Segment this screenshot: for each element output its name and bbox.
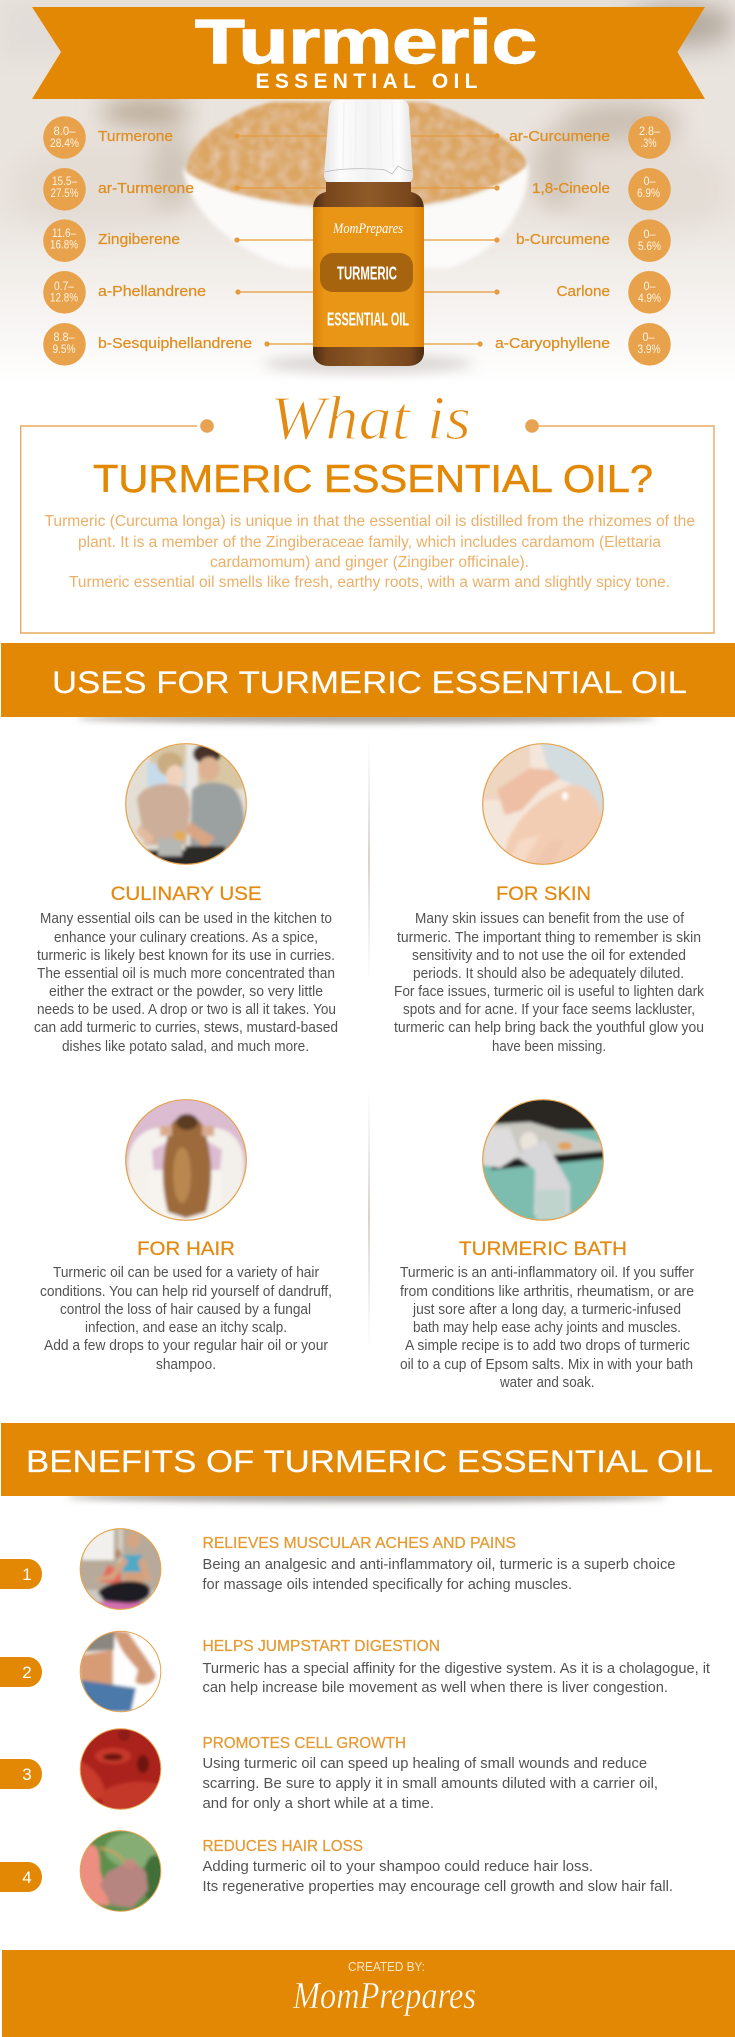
compound: b-Curcumene: 5.6% [638, 241, 661, 253]
compound: Zingiberene [43, 219, 180, 262]
compound: a-Phellandrene: a-Phellandrene [98, 284, 206, 300]
description: Its regenerative properties may encourage cell growth and slow hair fall. [202, 1878, 673, 1895]
compound: a-Caryophyllene: 0– [642, 332, 655, 344]
compound: ar-Curcumene [509, 116, 671, 159]
description: Turmeric has a special affinity for the digestive system. As it is a cholagogue, it [202, 1660, 711, 1677]
compound: Carlone [556, 271, 671, 314]
text: for hair: shampoo. [156, 1356, 216, 1373]
text: turmeric bath: oil to a cup of Epsom salts. Mix in with your bath [400, 1356, 693, 1373]
text: culinary use: dishes like potato salad, and much more. [62, 1038, 309, 1055]
text: for hair: control the loss of hair caused by a fungal [60, 1301, 311, 1318]
compound: b-Curcumene: b-Curcumene [516, 232, 610, 248]
compound: Zingiberene: 16.8% [50, 240, 78, 252]
heading: for skin: FOR SKIN [496, 883, 591, 905]
bottle name plate: Turmeric: TURMERIC [337, 264, 397, 284]
text: culinary use [34, 910, 338, 1055]
number tab 4: 4 [22, 1868, 32, 1887]
footer [2, 1950, 735, 2037]
photo: couple cooking [125, 743, 247, 865]
text: culinary use: The essential oil is much more concentrated than [37, 965, 335, 982]
panel: what is turmeric essential oil [21, 385, 714, 633]
heading: REDUCES HAIR LOSS [202, 1838, 363, 1855]
connector lines from bottle to compound labels [234, 133, 500, 347]
heading: RELIEVES MUSCULAR ACHES AND PAINS [202, 1535, 516, 1552]
compound: a-Caryophyllene: 3.9% [638, 344, 660, 356]
essential oil bottle [263, 100, 473, 373]
compound: ar-Turmerone: 27.5% [50, 188, 78, 200]
compound: ar-Turmerone: ar-Turmerone [98, 181, 194, 197]
compound: Turmerone: 28.4% [50, 138, 79, 150]
photo: woman meditating [80, 1528, 162, 1610]
description paragraph: cardamomum) and ginger (Zingiber officinale). [210, 554, 529, 571]
panel: culinary use [34, 740, 338, 1055]
compound: Carlone: Carlone [556, 284, 610, 300]
compound: a-Phellandrene: 0.7– [54, 281, 75, 293]
number tab 3 [0, 1759, 42, 1789]
compound: Turmerone: Turmerone [98, 129, 173, 145]
compound: a-Phellandrene: 12.8% [50, 292, 78, 304]
text: for skin: periods. It should also be adequately diluted. [413, 965, 684, 982]
compound: a-Phellandrene [43, 271, 206, 314]
photo: hand holding fallen hair [80, 1830, 162, 1912]
text: culinary use: Many essential oils can be used in the kitchen to [40, 910, 332, 927]
compound: a-Caryophyllene: a-Caryophyllene [495, 336, 610, 352]
description: Adding turmeric oil to your shampoo could reduce hair loss. [202, 1858, 593, 1875]
photo: hands applying cream [482, 743, 604, 865]
description: for massage oils intended specifically for aching muscles. [202, 1576, 572, 1593]
text: for hair [40, 1264, 332, 1373]
description paragraph: Turmeric essential oil smells like fresh, earthy roots, with a warm and slightly spicy tone. [69, 574, 670, 591]
benefit 2: digestion [0, 1629, 711, 1715]
compound: ar-Curcumene: .3% [640, 138, 656, 150]
photo: bath with towels [482, 1099, 604, 1221]
number tab 1 [0, 1559, 42, 1589]
number tab 4 [0, 1862, 42, 1892]
heading: for hair: FOR HAIR [137, 1238, 235, 1260]
text: culinary use: turmeric is likely best known for its use in curries. [37, 947, 335, 964]
section banner: uses: USES FOR TURMERIC ESSENTIAL OIL [52, 664, 687, 700]
text: for skin: turmeric can help bring back the youthful glow you [394, 1019, 704, 1036]
hero background photo: turmeric powder and roots [0, 0, 735, 342]
photo: loose jeans waist [78, 1629, 164, 1715]
text: for hair: infection, and ease an itchy scalp. [85, 1319, 287, 1336]
compound: 1,8-Cineole: 1,8-Cineole [532, 181, 610, 197]
compound: ar-Curcumene: 2.8– [639, 126, 661, 138]
title ribbon [32, 7, 705, 99]
compound: 1,8-Cineole [532, 168, 671, 211]
script heading: What is: What is [270, 385, 471, 453]
description [202, 1556, 676, 1593]
description [202, 1858, 673, 1895]
text: turmeric bath: Turmeric is an anti-inflammatory oil. If you suffer [400, 1264, 694, 1281]
compound: b-Curcumene: 0– [644, 229, 656, 241]
text: culinary use: can add turmeric to curries, stews, mustard-based [34, 1019, 338, 1036]
description [202, 1660, 711, 1696]
benefit 1: muscular aches [0, 1526, 676, 1614]
text: for hair: Add a few drops to your regular hair oil or your [44, 1337, 328, 1354]
panel: turmeric bath [400, 1095, 694, 1391]
benefit 3: cell growth [0, 1727, 658, 1813]
compound: 1,8-Cineole: 0– [644, 176, 656, 188]
bottle name plate: Turmeric [320, 253, 413, 292]
text: turmeric bath: A simple recipe is to add two drops of turmeric [405, 1337, 690, 1354]
bottle brand: MomPrepares: MomPrepares [332, 221, 403, 237]
section banner: benefits: BENEFITS OF TURMERIC ESSENTIAL OIL [26, 1443, 713, 1479]
text: for skin: For face issues, turmeric oil is useful to lighten dark [394, 983, 704, 1000]
description: scarring. Be sure to apply it in small amounts diluted with a carrier oil, [202, 1775, 658, 1792]
bottle text: Essential Oil: ESSENTIAL OIL [327, 310, 409, 330]
text: for skin: have been missing. [492, 1038, 606, 1055]
text: turmeric bath: from conditions like arthritis, rheumatism, or are [400, 1283, 694, 1300]
title: Turmeric: Turmeric [195, 8, 537, 77]
footer label: created by: CREATED BY: [348, 1960, 425, 1974]
compound: b-Sesquiphellandrene: 9.5% [52, 344, 76, 356]
description: Using turmeric oil can speed up healing of small wounds and reduce [202, 1755, 647, 1772]
text: culinary use: either the extract or the powder, so very little [49, 983, 323, 1000]
compound: ar-Turmerone: 15.5– [52, 176, 78, 188]
description: can help increase bile movement as well when there is liver congestion. [202, 1679, 668, 1696]
panel: for hair [40, 1095, 332, 1373]
compound: 1,8-Cineole: 6.9% [637, 188, 660, 200]
number tab 3: 3 [22, 1765, 32, 1784]
compound: a-Caryophyllene [495, 323, 671, 366]
description: and for only a short while at a time. [202, 1795, 434, 1812]
compound: Carlone: 0– [644, 281, 656, 293]
compound: Turmerone: 8.0– [54, 126, 76, 138]
number tab 1: 1 [22, 1565, 32, 1584]
panel: for skin [394, 740, 704, 1055]
compound: Turmerone [43, 116, 173, 159]
number tab 2: 2 [22, 1663, 32, 1682]
compound: Zingiberene: Zingiberene [98, 232, 180, 248]
description [202, 1755, 658, 1812]
heading: PROMOTES CELL GROWTH [202, 1735, 406, 1752]
right compound list [495, 116, 671, 366]
text: turmeric bath: just sore after a long day, a turmeric-infused [412, 1301, 681, 1318]
photo: woman with long hair [125, 1099, 247, 1221]
subtitle: Essential Oil: ESSENTIAL OIL [256, 70, 478, 93]
compound: ar-Curcumene: ar-Curcumene [509, 129, 610, 145]
photo: red blood cells [78, 1727, 164, 1813]
compound: Carlone: 4.9% [638, 293, 661, 305]
compound: b-Curcumene [516, 219, 671, 262]
compound: b-Sesquiphellandrene: 8.8– [54, 332, 75, 344]
text: culinary use: needs to be used. A drop or two is all it takes. You [37, 1001, 336, 1018]
compound: b-Sesquiphellandrene [43, 323, 252, 366]
text: turmeric bath: water and soak. [499, 1374, 594, 1391]
text: for hair: conditions. You can help rid yourself of dandruff, [40, 1283, 332, 1300]
heading: Turmeric Essential Oil?: TURMERIC ESSENTIAL OIL? [93, 458, 653, 501]
text: for skin: spots and for acne. If your face seems lackluster, [403, 1001, 695, 1018]
section banner: uses [1, 643, 735, 723]
text: turmeric bath [400, 1264, 694, 1391]
heading: HELPS JUMPSTART DIGESTION [202, 1638, 440, 1655]
heading: turmeric bath: TURMERIC BATH [459, 1238, 627, 1260]
benefit 4: hair loss [0, 1829, 673, 1915]
text: for skin [394, 910, 704, 1055]
text: for skin: turmeric. The important thing to remember is skin [397, 929, 701, 946]
number tab 2 [0, 1657, 42, 1687]
footer logo: MomPrepares: MomPrepares [292, 1975, 476, 2017]
heading: culinary use: CULINARY USE [111, 883, 262, 905]
description paragraph: plant. It is a member of the Zingiberaceae family, which includes cardamom (Elettaria [78, 534, 661, 551]
left compound list [43, 116, 252, 366]
text: turmeric bath: bath may help ease achy joints and muscles. [413, 1319, 681, 1336]
text: for hair: Turmeric oil can be used for a variety of hair [53, 1264, 319, 1281]
description paragraph: Turmeric (Curcuma longa) is unique in that the essential oil is distilled from the rhizomes of the [44, 513, 695, 530]
description paragraph [44, 513, 695, 591]
text: for skin: Many skin issues can benefit from the use of [415, 910, 685, 927]
compound: b-Sesquiphellandrene: b-Sesquiphellandrene [98, 336, 252, 352]
text: for skin: sensitivity and to not use the oil for extended [412, 947, 686, 964]
description: Being an analgesic and anti-inflammatory oil, turmeric is a superb choice [202, 1556, 676, 1573]
compound: Zingiberene: 11.6– [52, 228, 77, 240]
section banner: benefits [1, 1423, 735, 1502]
text: culinary use: enhance your culinary creations. As a spice, [54, 929, 318, 946]
compound: ar-Turmerone [43, 168, 194, 211]
